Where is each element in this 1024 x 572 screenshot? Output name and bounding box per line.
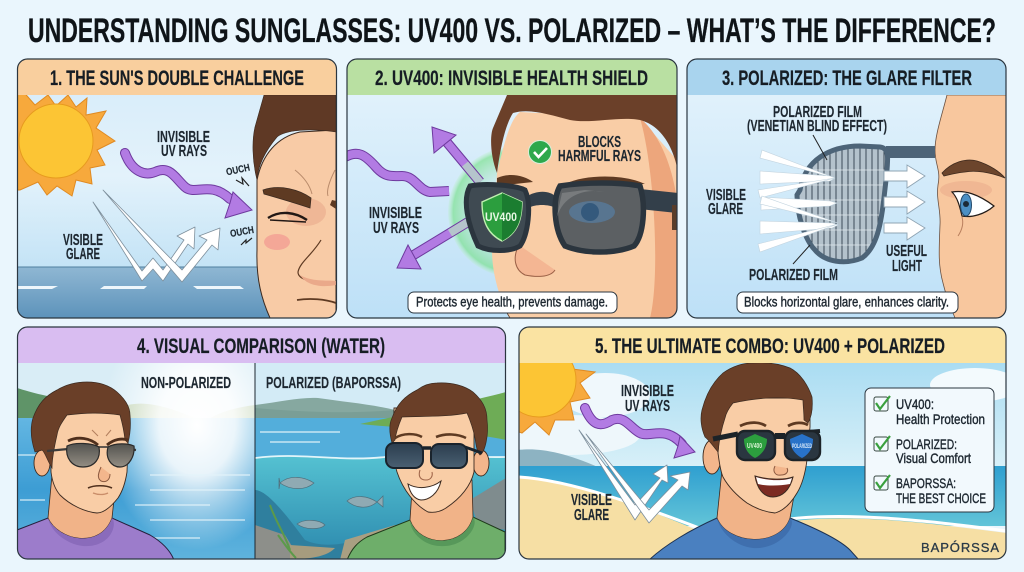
item: baporssa: BAPORSSA:	[896, 475, 956, 491]
label: visible glare	[706, 187, 746, 218]
illustration: face profile	[935, 95, 1007, 318]
icon: green shield lens: UV400	[747, 443, 762, 450]
label: invisible UV rays	[369, 205, 422, 237]
panel: visual comparison	[17, 327, 506, 560]
illustration: pained face	[253, 95, 336, 318]
icon: fish	[279, 477, 383, 529]
illustration: face	[491, 95, 677, 318]
label: polarized baporssa: POLARIZED (BAPORSSA)	[266, 375, 401, 392]
label: visible glare: VISIBLE	[706, 187, 746, 204]
icon: green check	[528, 140, 552, 164]
item: baporssa: THE BEST CHOICE	[896, 490, 986, 506]
item: UV400: UV400:	[896, 396, 934, 412]
scene: polarized water	[255, 362, 506, 560]
label: invisible UV rays	[621, 383, 674, 415]
panel: polarized glare filter	[687, 59, 1007, 319]
label: invisible UV rays: INVISIBLE	[621, 383, 674, 400]
label: ouch	[225, 163, 255, 240]
item: UV400: Health Protection	[896, 411, 985, 427]
arrows: incoming glare	[758, 150, 838, 252]
panel: the sun's double challenge	[17, 59, 337, 319]
icon: UV400 shield: UV400	[485, 210, 517, 224]
label: blocks harmful rays: BLOCKS	[578, 134, 621, 151]
icon: green shield lens	[744, 434, 767, 458]
arrow: deflected UV up	[432, 127, 480, 182]
label: invisible UV rays: UV RAYS	[625, 398, 670, 415]
scene: non-polarized water	[17, 362, 255, 560]
logo: BAPÓRSSA	[921, 540, 999, 555]
label: polarized film venetian blind: (VENETIAN BLIND EFFECT)	[747, 118, 887, 135]
item: polarized: Visual Comfort	[896, 450, 971, 466]
label: polarized film venetian blind	[747, 104, 887, 135]
item: baporssa	[874, 475, 986, 506]
panel: UV400 invisible health shield	[345, 59, 680, 319]
label: ouch: OUCH	[225, 163, 251, 178]
label: useful light	[886, 243, 927, 275]
arrow: incoming UV wave	[345, 154, 449, 192]
label: visible glare: GLARE	[574, 507, 609, 524]
heading: 1. THE SUN'S DOUBLE CHALLENGE	[50, 67, 304, 90]
label: visible glare: VISIBLE	[571, 492, 612, 509]
heading: 2. UV400: INVISIBLE HEALTH SHIELD	[375, 67, 648, 90]
arrows: useful light	[884, 165, 925, 240]
label: invisible UV rays: INVISIBLE	[157, 129, 210, 146]
label: visible glare	[63, 232, 103, 263]
arrow: visible glare	[93, 190, 220, 282]
polarized lens	[797, 145, 890, 265]
sunglasses temple	[886, 146, 935, 158]
heading: 4. VISUAL COMPARISON (WATER)	[137, 335, 385, 358]
item: UV400	[874, 396, 985, 427]
icon: sun	[520, 363, 596, 436]
label: invisible UV rays: UV RAYS	[161, 143, 207, 160]
man: polarized smiling	[347, 383, 505, 560]
icon: blue shield lens	[790, 434, 813, 458]
label: ouch: OUCH	[229, 225, 255, 240]
sunglasses	[466, 183, 680, 252]
man: happy with combo sunglasses	[649, 363, 859, 560]
arrow: invisible UV rays	[125, 153, 252, 218]
shield halo	[448, 148, 503, 274]
label: blocks harmful rays	[558, 134, 641, 165]
label: useful light: LIGHT	[892, 258, 922, 275]
label: polarized film venetian blind: POLARIZED FILM	[773, 104, 862, 121]
label: non-polarized: NON-POLARIZED	[141, 375, 231, 392]
leader lines	[793, 135, 827, 264]
water	[18, 266, 270, 318]
label: invisible UV rays	[157, 129, 210, 160]
callout: Protects eye health, prevents damage.	[416, 294, 608, 310]
label: useful light: USEFUL	[886, 243, 927, 260]
arrow: invisible UV rays	[585, 408, 695, 458]
man: non-polarized squinting	[17, 382, 174, 560]
label: visible glare	[571, 492, 612, 524]
label: invisible UV rays: UV RAYS	[373, 220, 419, 237]
label: invisible UV rays: INVISIBLE	[369, 205, 422, 222]
arrow: deflected UV down	[397, 222, 468, 269]
icon: pain marks	[236, 178, 252, 245]
label: visible glare: GLARE	[708, 201, 743, 218]
panel: ultimate combo	[500, 327, 1020, 560]
callout	[737, 292, 958, 313]
arrow: visible glare	[579, 430, 690, 523]
label: polarized film: POLARIZED FILM	[749, 267, 838, 284]
beach scene	[500, 362, 1020, 560]
label: visible glare: GLARE	[66, 246, 100, 263]
item: polarized: POLARIZED:	[896, 436, 957, 452]
label: visible glare: VISIBLE	[63, 232, 103, 249]
item: polarized	[874, 436, 971, 466]
callout: Blocks horizontal glare, enhances clarity.	[744, 294, 949, 310]
callout	[408, 292, 617, 313]
icon: UV400 shield	[482, 193, 522, 241]
icon: blue shield lens: POLARIZED	[792, 444, 812, 450]
checklist	[865, 388, 994, 512]
label: blocks harmful rays: HARMFUL RAYS	[558, 148, 641, 165]
icon: sun	[17, 88, 115, 196]
